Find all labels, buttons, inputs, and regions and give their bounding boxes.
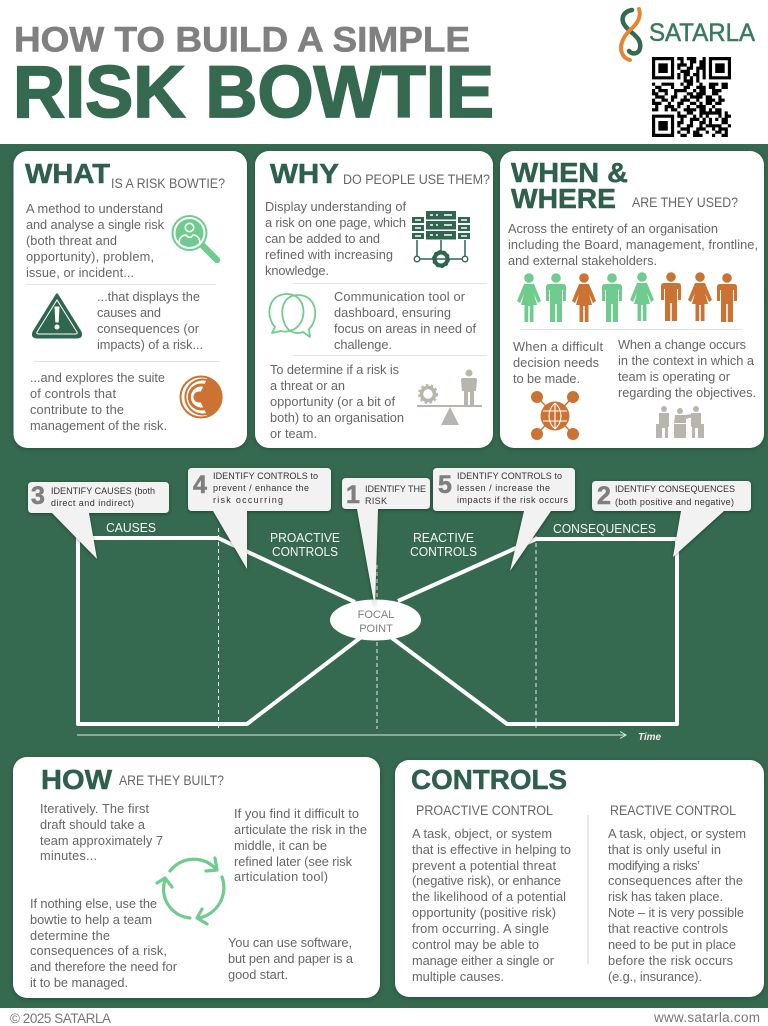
- column: reactive control: that reactive controls: [608, 921, 728, 936]
- text: communication tool: [334, 289, 476, 352]
- column: proactive control: prevent a potential threat: [412, 858, 556, 873]
- text: iteratively: [40, 801, 163, 863]
- panel: what: [14, 151, 247, 448]
- focal point: FOCAL: [358, 609, 394, 621]
- text: threat or opportunity: To determine if a risk is: [270, 362, 399, 377]
- QR code: [652, 57, 731, 137]
- label: reactive controls: REACTIVE: [413, 531, 474, 545]
- text: across the organisation: and external stakeholders.: [508, 253, 657, 268]
- text: if nothing else: determine the: [30, 928, 110, 943]
- heading: why: WHY: [270, 158, 339, 189]
- column: proactive control: opportunity (positive risk): [412, 905, 556, 920]
- focal point: [330, 600, 421, 640]
- callout 5: reactive controls: IDENTIFY CONTROLS to: [457, 471, 562, 481]
- text: iteratively: draft should take a: [40, 817, 146, 832]
- text: iteratively: team approximately 7: [40, 833, 163, 848]
- column: proactive control: manage either a single or: [412, 953, 555, 968]
- text: change in context: When a change occurs: [618, 337, 746, 352]
- text: if nothing else: and therefore the need for: [30, 959, 178, 974]
- column: reactive control: before the risk occurs: [608, 953, 733, 968]
- text: communication tool: challenge.: [334, 337, 392, 352]
- label: proactive controls: PROACTIVE: [270, 531, 340, 545]
- icon: row of people: [517, 272, 737, 322]
- panel: when and where: [500, 151, 764, 448]
- heading: why: [270, 158, 490, 189]
- heading: what: IS A RISK BOWTIE?: [111, 176, 225, 191]
- focal point: POINT: [359, 623, 393, 635]
- text: suite of controls: contribute to the: [30, 402, 124, 417]
- text: threat or opportunity: a threat or an: [270, 378, 345, 393]
- text: change in context: team is operating or: [618, 369, 731, 384]
- time axis: [77, 732, 661, 743]
- column: proactive control: multiple causes.: [412, 969, 504, 984]
- icon: seesaw: [417, 370, 482, 425]
- column: reactive control: that is only useful in: [608, 842, 721, 857]
- text: causes and consequences: causes and: [97, 305, 161, 320]
- callout 4: proactive controls: 4: [193, 471, 207, 499]
- callout 3: causes: 3: [31, 482, 45, 510]
- text: articulate the risk: articulate the risk in the: [234, 822, 367, 837]
- icon: cycle arrows: [157, 858, 224, 924]
- text: suite of controls: ...and explores the suite: [30, 370, 165, 385]
- column: proactive control: (negative risk), or enhance: [412, 873, 561, 888]
- dashed time dividers: [218, 528, 536, 730]
- text: threat or opportunity: or team.: [270, 426, 317, 441]
- text: method: [26, 201, 165, 280]
- text: articulate the risk: middle, it can be: [234, 838, 327, 853]
- text: software or pen and paper: but pen and paper is a: [228, 951, 354, 966]
- callout 2: consequences: [592, 481, 751, 557]
- footer: © 2025 SATARLA: [10, 1011, 111, 1026]
- text: software or pen and paper: [228, 935, 354, 982]
- text: display understanding: refined with increasing: [265, 247, 393, 262]
- text: across the organisation: Across the entirety of an organisation: [508, 221, 718, 236]
- heading: what: WHAT: [25, 158, 110, 189]
- column: proactive control: A task, object, or system: [412, 826, 552, 841]
- heading: when and where: WHERE: [511, 183, 616, 214]
- text: change in context: regarding the objectives.: [618, 385, 756, 400]
- icon: speech bubbles: [269, 294, 315, 337]
- label: reactive controls: CONTROLS: [410, 545, 477, 559]
- text: difficult decision: [513, 339, 603, 386]
- text: articulate the risk: [234, 806, 367, 884]
- column: proactive control: control may be able to: [412, 937, 539, 952]
- text: suite of controls: [30, 370, 167, 433]
- text: across the organisation: including the Board, management, frontline,: [508, 237, 758, 252]
- text: display understanding: [265, 199, 406, 278]
- time axis: Time: [638, 732, 661, 743]
- column: reactive control: risk has taken place.: [608, 889, 723, 904]
- title: RISK BOWTIE: [13, 52, 494, 133]
- text: suite of controls: management of the risk.: [30, 418, 167, 433]
- icon: warning triangle: [33, 295, 81, 337]
- column: proactive control: PROACTIVE CONTROL: [416, 803, 553, 818]
- text: if nothing else: [30, 896, 178, 990]
- heading: how: HOW: [41, 764, 113, 795]
- footer: www.satarla.com: [653, 1010, 760, 1025]
- text: iteratively: Iteratively. The first: [40, 801, 149, 816]
- callout 1: identify the risk: [342, 478, 430, 608]
- heading: when and where: WHEN &: [511, 157, 628, 188]
- column: reactive control: Note – it is very possible: [608, 905, 744, 920]
- label: causes: CAUSES: [106, 521, 156, 535]
- heading: when and where: ARE THEY USED?: [632, 195, 738, 210]
- column: proactive control: that is effective in helping to: [412, 842, 571, 857]
- text: difficult decision: When a difficult: [513, 339, 603, 354]
- column: proactive control: [412, 803, 571, 984]
- text: method: opportunity), problem,: [26, 249, 154, 264]
- heading: why: DO PEOPLE USE THEM?: [343, 172, 490, 187]
- text: threat or opportunity: both) to an organisation: [270, 410, 404, 425]
- icon: orange target C: [180, 376, 223, 418]
- callout 4: proactive controls: IDENTIFY CONTROLS to: [213, 471, 318, 481]
- panel: how: [13, 757, 380, 998]
- text: display understanding: can be added to and: [265, 231, 380, 246]
- callout 5: reactive controls: 5: [438, 471, 452, 499]
- label: proactive controls: CONTROLS: [272, 545, 338, 559]
- callout 5: reactive controls: lessen / increase the: [457, 483, 550, 493]
- column: proactive control: the likelihood of a potential: [412, 889, 566, 904]
- heading: how: [41, 764, 224, 795]
- footer: [10, 1010, 760, 1026]
- callout 1: identify the risk: RISK: [365, 496, 387, 506]
- panel: why: [255, 151, 493, 448]
- label: consequences: CONSEQUENCES: [553, 522, 656, 536]
- column: reactive control: [608, 803, 746, 984]
- text: causes and consequences: ...that displays the: [97, 289, 200, 304]
- text: threat or opportunity: opportunity (or a bit of: [270, 394, 395, 409]
- logo: Satarla: SATARLA: [649, 19, 755, 47]
- callout 3: causes: IDENTIFY CAUSES (both: [51, 486, 155, 496]
- text: if nothing else: If nothing else, use the: [30, 896, 157, 911]
- text: difficult decision: to be made.: [513, 371, 580, 386]
- column: reactive control: REACTIVE CONTROL: [610, 803, 736, 818]
- callout 3: causes: [28, 482, 169, 559]
- icon: orange globe network: [531, 391, 579, 440]
- icon: servers and gear: [412, 211, 470, 267]
- text: software or pen and paper: You can use software,: [228, 935, 352, 950]
- text: software or pen and paper: good start.: [228, 967, 288, 982]
- text: method: issue, or incident...: [26, 265, 134, 280]
- text: display understanding: knowledge.: [265, 263, 329, 278]
- callout 5: reactive controls: impacts if the risk occurs: [457, 495, 568, 505]
- text: method: (both threat and: [26, 233, 117, 248]
- text: difficult decision: decision needs: [513, 355, 599, 370]
- text: articulate the risk: If you find it difficult to: [234, 806, 359, 821]
- heading: how: ARE THEY BUILT?: [119, 773, 224, 788]
- text: change in context: in the context in which a: [618, 353, 755, 368]
- heading: what: [25, 158, 225, 191]
- text: if nothing else: bowtie to help a team: [30, 912, 152, 927]
- callout 4: proactive controls: [188, 468, 331, 569]
- text: suite of controls: of controls that: [30, 386, 116, 401]
- heading: when and where: [511, 157, 738, 214]
- chart: risk bowtie diagram: [28, 468, 751, 743]
- callout 4: proactive controls: risk occurring: [213, 495, 283, 505]
- text: iteratively: minutes...: [40, 848, 97, 863]
- text: causes and consequences: consequences (or: [97, 321, 200, 336]
- text: causes and consequences: [97, 289, 203, 352]
- text: articulate the risk: articulation tool): [234, 869, 328, 884]
- label: proactive controls: [270, 531, 340, 559]
- text: if nothing else: it to be managed.: [30, 975, 128, 990]
- text: causes and consequences: impacts) of a risk...: [97, 337, 203, 352]
- bowtie outline: [78, 538, 677, 724]
- callout 2: consequences: (both positive and negative): [615, 497, 734, 507]
- text: across the organisation: [508, 221, 758, 268]
- text: change in context: [618, 337, 756, 400]
- callout 1: identify the risk: 1: [346, 481, 360, 509]
- callout 3: causes: direct and indirect): [51, 498, 134, 508]
- column: proactive control: from occurring. A single: [412, 921, 549, 936]
- text: if nothing else: consequences of a risk,: [30, 943, 167, 958]
- text: communication tool: dashboard, ensuring: [334, 305, 451, 320]
- text: method: A method to understand: [26, 201, 163, 216]
- column: reactive control: modifying a risks’: [608, 858, 700, 873]
- panel: controls: [395, 760, 764, 997]
- callout 2: consequences: 2: [597, 482, 611, 510]
- text: display understanding: a risk on one page, which: [265, 215, 406, 230]
- text: display understanding: Display understanding of: [265, 199, 406, 214]
- callout 5: reactive controls: [433, 468, 575, 571]
- heading: controls: CONTROLS: [411, 764, 567, 795]
- text: articulate the risk: refined later (see risk: [234, 854, 353, 869]
- text: threat or opportunity: [270, 362, 404, 441]
- icon: meeting around table: [656, 406, 704, 438]
- column: reactive control: A task, object, or system: [608, 826, 746, 841]
- callout 4: proactive controls: prevent / enhance the: [213, 483, 309, 493]
- column: reactive control: need to be put in place: [608, 937, 736, 952]
- text: communication tool: focus on areas in need of: [334, 321, 476, 336]
- text: method: and analyse a single risk: [26, 217, 165, 232]
- logo: Satarla: [621, 9, 755, 60]
- column: reactive control: consequences after the: [608, 873, 743, 888]
- text: communication tool: Communication tool or: [334, 289, 466, 304]
- title: HOW TO BUILD A SIMPLE: [14, 20, 470, 60]
- callout 1: identify the risk: IDENTIFY THE: [365, 484, 426, 494]
- column: reactive control: (e.g., insurance).: [608, 969, 702, 984]
- callout 2: consequences: IDENTIFY CONSEQUENCES: [615, 484, 735, 494]
- label: reactive controls: [410, 531, 477, 559]
- icon: magnifier with person: [172, 216, 217, 260]
